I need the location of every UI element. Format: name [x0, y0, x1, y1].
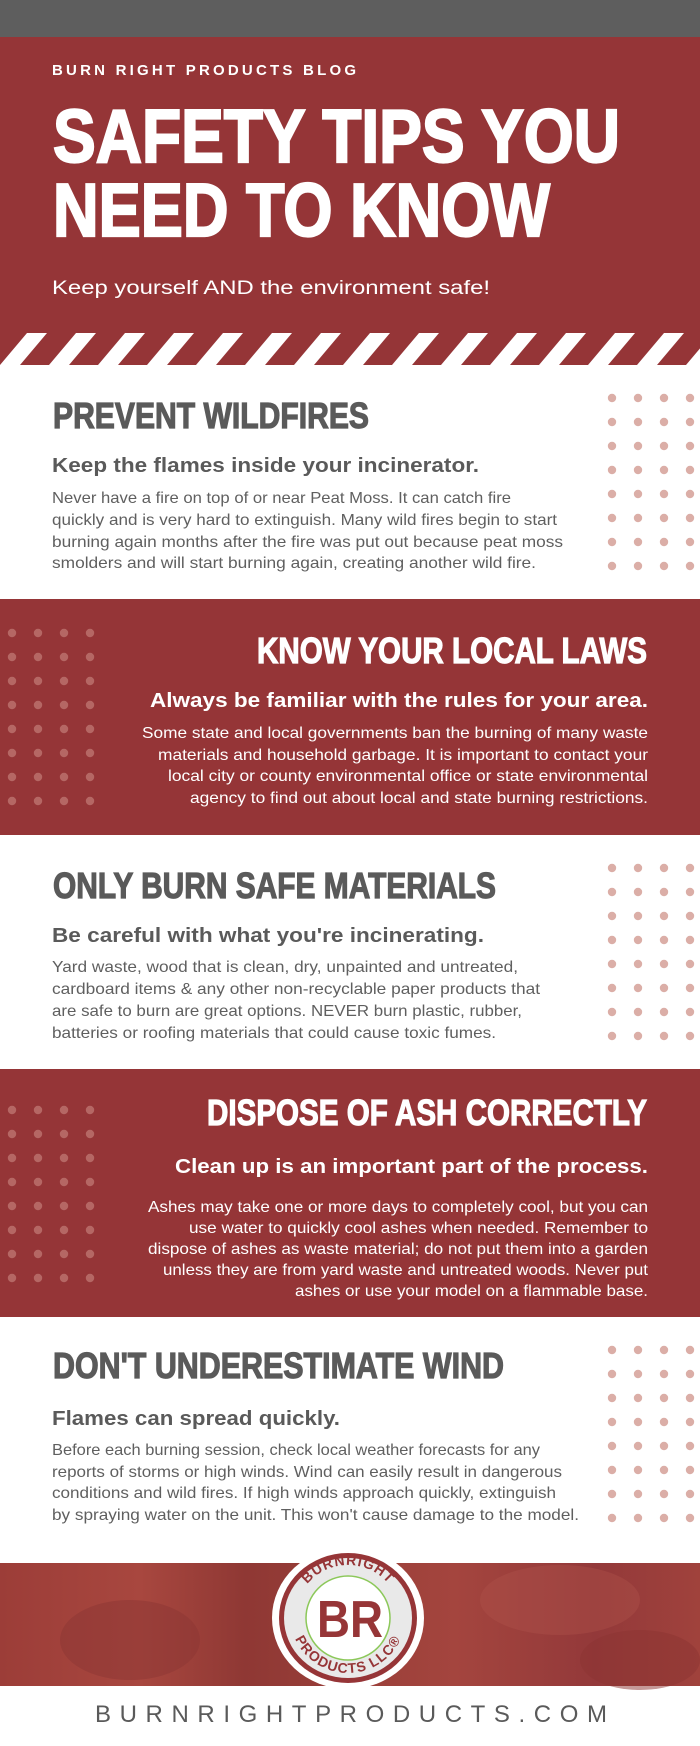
body: cardboard items & any other non-recyclable paper products that [52, 981, 541, 998]
top gray bar [0, 0, 700, 37]
logo badge: BURNRIGHT [302, 1558, 394, 1584]
blog label: BURN RIGHT PRODUCTS BLOG [52, 62, 356, 79]
body: quickly and is very hard to extinguish. Many wild fires begin to start [52, 512, 558, 529]
body: Before each burning session, check local weather forecasts for any [52, 1442, 540, 1459]
body: smolders and will start burning again, creating another wild fire. [52, 555, 536, 572]
panel: dispose of ash correctly [0, 1069, 700, 1317]
dots [7, 1105, 109, 1297]
footer flame band [0, 1563, 700, 1690]
heading: DON'T UNDERESTIMATE WIND [53, 1345, 504, 1386]
header panel [0, 37, 700, 333]
body: use water to quickly cool ashes when needed. Remember to [189, 1220, 648, 1237]
body: dispose of ashes as waste material; do not put them into a garden [148, 1241, 648, 1258]
panel: know your local laws [0, 599, 700, 835]
body: ashes or use your model on a flammable base. [295, 1283, 648, 1300]
panel: only burn safe materials [0, 835, 700, 1069]
body: materials and household garbage. It is important to contact your [158, 747, 649, 764]
body [142, 725, 649, 807]
subheading: Clean up is an important part of the process. [175, 1156, 648, 1178]
body: burning again months after the fire was put out because peat moss [52, 534, 563, 551]
body: Ashes may take one or more days to completely cool, but you can [148, 1199, 648, 1216]
hazard stripes band [0, 333, 700, 365]
body: batteries or roofing materials that could cause toxic fumes. [52, 1025, 496, 1042]
logo badge: BR [317, 1591, 383, 1649]
main title [53, 94, 620, 252]
panel: don't underestimate wind [0, 1317, 700, 1563]
main title: SAFETY TIPS YOU [53, 94, 620, 178]
body: are safe to burn are great options. NEVER burn plastic, rubber, [52, 1003, 522, 1020]
dots [607, 863, 700, 1055]
panel: prevent wildfires [0, 365, 700, 599]
main title: NEED TO KNOW [53, 168, 550, 252]
heading: PREVENT WILDFIRES [53, 395, 369, 436]
subheading: Always be familiar with the rules for your area. [150, 690, 648, 712]
body [52, 490, 563, 572]
body: unless they are from yard waste and untreated woods. Never put [163, 1262, 649, 1279]
body: by spraying water on the unit. This won't cause damage to the model. [52, 1507, 579, 1524]
body: Yard waste, wood that is clean, dry, unpainted and untreated, [52, 959, 518, 976]
body: conditions and wild fires. If high winds approach quickly, extinguish [52, 1485, 556, 1502]
logo badge [272, 1553, 424, 1686]
dots [607, 393, 700, 585]
body [52, 1442, 579, 1524]
body [148, 1199, 649, 1300]
dots [607, 1345, 700, 1537]
subheading: Flames can spread quickly. [52, 1408, 340, 1430]
subtitle: Keep yourself AND the environment safe! [52, 278, 490, 299]
body: agency to find out about local and state burning restrictions. [190, 790, 648, 807]
subheading: Keep the flames inside your incinerator. [52, 455, 479, 477]
logo badge: PRODUCTS LLC® [295, 1634, 399, 1673]
subheading: Be careful with what you're incinerating. [52, 925, 484, 947]
body: reports of storms or high winds. Wind can easily result in dangerous [52, 1464, 562, 1481]
website url: BURNRIGHTPRODUCTS.COM [95, 1701, 607, 1728]
heading: ONLY BURN SAFE MATERIALS [53, 865, 496, 906]
dots [7, 628, 109, 820]
body: local city or county environmental office or state environmental [168, 768, 648, 785]
body: Never have a fire on top of or near Peat Moss. It can catch fire [52, 490, 511, 507]
body [52, 959, 541, 1042]
body: Some state and local governments ban the burning of many waste [142, 725, 648, 742]
